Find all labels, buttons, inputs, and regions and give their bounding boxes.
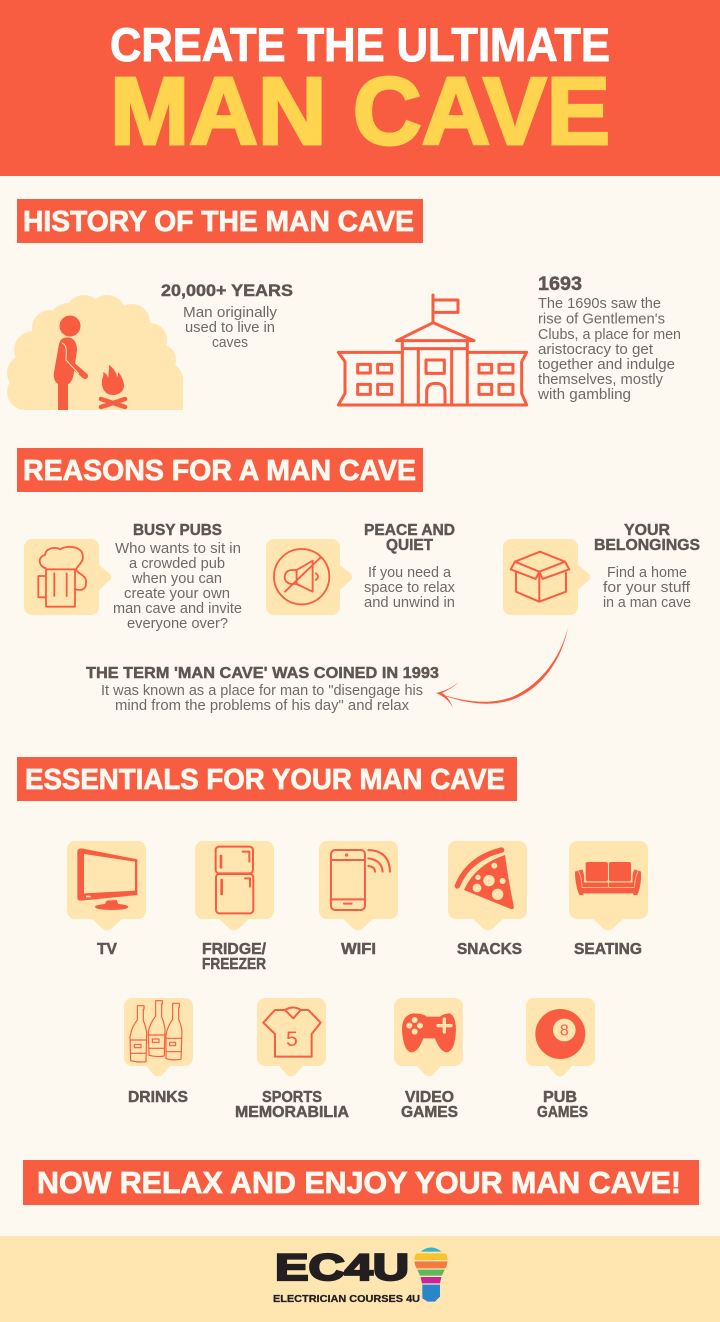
text block: peace and quiet: PEACE AND — [364, 522, 455, 539]
text block: your belongings — [594, 522, 700, 611]
text block: 20,000+ years: 20,000+ YEARS — [161, 281, 293, 300]
text block: your belongings: Find a home — [607, 564, 687, 581]
icon: beer mug callout — [24, 539, 111, 615]
text block: busy pubs: man cave and invite — [113, 600, 242, 617]
icon: tv — [77, 848, 137, 910]
logo tagline: ELECTRICIAN COURSES 4U — [273, 1293, 420, 1305]
essential: pub games: PUB — [543, 1089, 577, 1106]
section heading: essentials: ESSENTIALS FOR YOUR MAN CAVE — [25, 764, 505, 796]
text block: 20,000+ years: caves — [212, 334, 248, 351]
essential: tv: TV — [97, 941, 117, 958]
text block: peace and quiet: and unwind in — [364, 594, 455, 611]
text block: your belongings: YOUR — [624, 522, 670, 539]
icon: muted speaker callout — [266, 539, 352, 615]
icon: fridge — [216, 847, 253, 913]
cave shape — [7, 295, 183, 410]
section heading: reasons: REASONS FOR A MAN CAVE — [23, 455, 416, 487]
essential: sports memorabilia: SPORTS — [262, 1089, 322, 1106]
essential: snacks — [448, 841, 527, 958]
man figure — [54, 316, 85, 410]
text block: term coined in 1993: It was known as a place for man to "disengage his — [101, 682, 423, 699]
text block: your belongings: in a man cave — [603, 594, 691, 611]
text block: 1693: aristocracy to get — [538, 341, 654, 358]
essential: seating: SEATING — [574, 941, 642, 958]
title line: create the ultimate: CREATE THE ULTIMATE — [110, 18, 610, 71]
essential: fridge/freezer: FRIDGE/ — [202, 941, 267, 958]
text block: term coined in 1993: mind from the problems of his day" and relax — [115, 697, 409, 714]
essential: fridge/freezer: FREEZER — [202, 956, 266, 973]
text block: 1693: 1693 — [538, 274, 582, 295]
essential: drinks: DRINKS — [128, 1089, 188, 1106]
section heading: history: HISTORY OF THE MAN CAVE — [23, 206, 414, 238]
essential: wifi: WIFI — [341, 941, 376, 958]
logo wordmark: EC4U — [275, 1247, 409, 1288]
icon: numbered shirt: 5 — [286, 1027, 298, 1051]
text block: 1693: together and indulge — [538, 356, 675, 373]
essential: pub games — [526, 998, 595, 1121]
text block: 1693: with gambling — [537, 386, 631, 403]
title line: man cave: MAN CAVE — [110, 58, 610, 165]
text block: 20,000+ years: Man originally — [183, 304, 278, 321]
text block: term coined in 1993 — [86, 665, 439, 714]
text block: busy pubs: BUSY PUBS — [133, 522, 222, 539]
icon: rainbow light bulb — [414, 1247, 448, 1302]
icon: game controller — [402, 1013, 456, 1052]
essential: video games: GAMES — [401, 1104, 458, 1121]
icon: pizza slice — [457, 850, 514, 909]
text block: your belongings: BELONGINGS — [594, 537, 700, 554]
essential: video games — [394, 998, 463, 1121]
essential: wifi — [319, 841, 398, 958]
text block: 20,000+ years: used to live in — [185, 319, 275, 336]
icon: open box callout — [503, 539, 590, 615]
arrow: curved to term text — [436, 627, 568, 708]
text block: busy pubs: a crowded pub — [129, 555, 225, 572]
illustration: man by fire in cave — [7, 295, 183, 410]
text block: 1693: The 1690s saw the — [538, 295, 661, 312]
essential: fridge/freezer — [195, 841, 274, 973]
text block: 20,000+ years — [161, 281, 293, 351]
icon: gentlemen's club building — [338, 295, 527, 405]
icon: three bottles — [130, 1001, 182, 1062]
icon: eight ball: 8 — [560, 1023, 569, 1040]
text block: your belongings: for your stuff — [603, 579, 691, 596]
text block: busy pubs: everyone over? — [127, 615, 228, 632]
text block: busy pubs: when you can — [131, 570, 222, 587]
essential: seating — [569, 841, 648, 958]
closing banner: NOW RELAX AND ENJOY YOUR MAN CAVE! — [37, 1165, 681, 1200]
text block: peace and quiet: space to relax — [364, 579, 455, 596]
text block: busy pubs: create your own — [124, 585, 230, 602]
essential: snacks: SNACKS — [457, 941, 522, 958]
text block: 1693: rise of Gentlemen's — [538, 310, 665, 328]
essential: sports memorabilia — [235, 998, 349, 1121]
text block: 1693 — [537, 274, 681, 403]
icon: phone with wifi — [331, 850, 390, 910]
text block: term coined in 1993: THE TERM 'MAN CAVE' WAS COINED IN 1993 — [86, 665, 439, 682]
text block: busy pubs — [113, 522, 242, 632]
header banner — [0, 0, 720, 176]
essential: pub games: GAMES — [537, 1104, 588, 1121]
text block: 1693: Clubs, a place for men — [538, 326, 681, 343]
text block: peace and quiet — [364, 522, 455, 611]
text block: busy pubs: Who wants to sit in — [115, 540, 241, 557]
text block: peace and quiet: QUIET — [386, 537, 433, 554]
text block: 1693: themselves, mostly — [538, 371, 663, 388]
essential: video games: VIDEO — [405, 1089, 454, 1106]
icon: sofa — [575, 862, 641, 895]
campfire — [101, 365, 125, 407]
essential: tv — [67, 841, 146, 958]
essential: sports memorabilia: MEMORABILIA — [235, 1104, 349, 1121]
text block: peace and quiet: If you need a — [368, 564, 452, 581]
essential: drinks — [124, 998, 193, 1106]
footer with logo — [0, 1236, 720, 1322]
